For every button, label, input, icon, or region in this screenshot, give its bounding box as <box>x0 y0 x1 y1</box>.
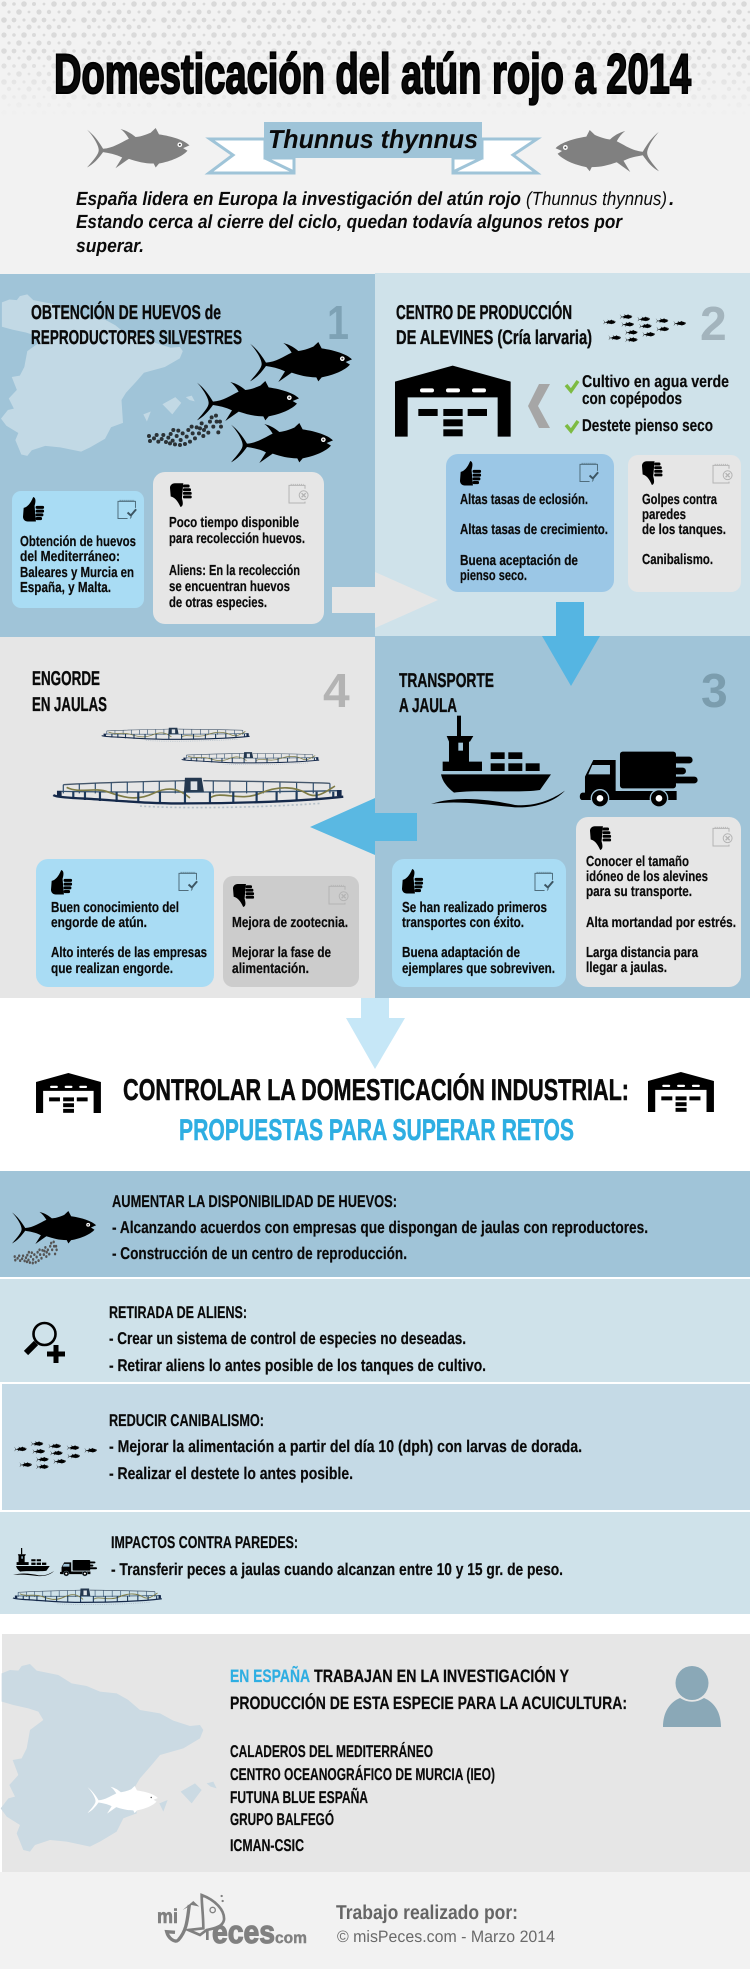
checklist <box>566 372 729 435</box>
icons: ship, truck, cage <box>13 1548 162 1605</box>
card: pros: Altas tasas de eclosión. <box>460 492 588 508</box>
text: - Construcción de un centro de reproducción. <box>112 1244 407 1263</box>
card: pros: pienso seco. <box>460 568 527 584</box>
heading: DE ALEVINES (Cría larvaria) <box>396 327 592 349</box>
card: cons: llegar a jaulas. <box>586 960 667 976</box>
icon: warehouse right <box>648 1072 714 1112</box>
credit: Trabajo realizado por: <box>336 1902 518 1924</box>
card: cons: de los tanques. <box>642 522 726 538</box>
card: cons: Mejorar la fase de <box>232 945 331 961</box>
icon: grey tuna right <box>556 130 659 172</box>
text: - Realizar el destete lo antes posible. <box>109 1464 353 1483</box>
checklist: Destete pienso seco <box>582 416 713 435</box>
card: cons: Golpes contra <box>642 492 718 508</box>
card: pros <box>36 859 214 987</box>
card: pros <box>12 491 144 608</box>
list of organisations: CENTRO OCEANOGRÁFICO DE MURCIA (IEO) <box>230 1764 495 1784</box>
card: cons: Canibalismo. <box>642 552 713 568</box>
heading <box>230 1665 627 1713</box>
heading: EN JAULAS <box>32 694 107 716</box>
list of organisations: CALADEROS DEL MEDITERRÁNEO <box>230 1741 433 1761</box>
section heading <box>123 1073 629 1147</box>
card: pros: del Mediterráneo: <box>20 549 120 565</box>
card: pros: Buena aceptación de <box>460 553 578 569</box>
list of organisations: ICMAN-CSIC <box>230 1836 304 1855</box>
footer <box>0 1872 750 1969</box>
icon: magnifier <box>26 1323 65 1363</box>
card: cons: para su transporte. <box>586 884 692 900</box>
card: cons: de otras especies. <box>169 595 267 611</box>
text: - Retirar aliens lo antes posible de los tanques de cultivo. <box>109 1356 486 1375</box>
band: aumentar huevos <box>0 1171 750 1277</box>
eggs <box>147 414 223 447</box>
card: pros: Se han realizado primeros <box>402 900 547 916</box>
card: pros: que realizan engorde. <box>51 961 173 977</box>
species ribbon <box>209 122 537 173</box>
heading: TRANSPORTE <box>399 670 494 692</box>
card: cons: idóneo de los alevines <box>586 869 708 885</box>
card: pros: transportes con éxito. <box>402 915 524 931</box>
card: cons: se encuentran huevos <box>169 579 290 595</box>
icon: tuna and eggs <box>12 1211 96 1264</box>
text <box>109 1411 582 1483</box>
card: pros: Buena adaptación de <box>402 945 520 961</box>
logo misPeces: com <box>275 1930 307 1947</box>
number 1: 1 <box>327 297 349 350</box>
card: pros: Alto interés de las empresas <box>51 945 207 961</box>
icon: warehouse left <box>36 1073 101 1113</box>
list of organisations: FUTUNA BLUE ESPAÑA <box>230 1787 368 1807</box>
card: cons: Aliens: En la recolección <box>169 563 300 579</box>
card: cons <box>153 472 324 624</box>
icon: warehouse <box>395 366 511 437</box>
icon: small fish school <box>14 1441 97 1469</box>
intro paragraph: superar. <box>76 236 144 257</box>
icon: grey tuna left <box>87 128 190 168</box>
list of organisations <box>230 1741 495 1855</box>
credit: © misPeces.com - Marzo 2014 <box>337 1928 555 1946</box>
heading: PRODUCCIÓN DE ESTA ESPECIE PARA LA ACUICULTURA: <box>230 1693 627 1713</box>
text: - Transferir peces a jaulas cuando alcanzan entre 10 y 15 gr. de peso. <box>111 1560 563 1579</box>
icon: person <box>663 1666 721 1727</box>
heading: REPRODUCTORES SILVESTRES <box>31 327 242 349</box>
text <box>111 1533 563 1579</box>
text: REDUCIR CANIBALISMO: <box>109 1411 264 1430</box>
map of Spain <box>1 294 195 456</box>
band: retirada de aliens <box>0 1279 750 1382</box>
logo misPeces: mi <box>157 1906 178 1928</box>
heading: CENTRO DE PRODUCCIÓN <box>396 301 572 324</box>
icon: truck <box>580 752 698 807</box>
heading: A JAULA <box>399 695 457 717</box>
credit <box>336 1902 555 1946</box>
card: pros: engorde de atún. <box>51 915 147 931</box>
card: cons: Poco tiempo disponible <box>169 515 299 531</box>
heading: ENGORDE <box>32 668 100 690</box>
logo misPeces: eces <box>212 1914 275 1950</box>
text <box>112 1192 648 1263</box>
arrow: to proposals <box>346 998 405 1069</box>
cages <box>53 728 343 808</box>
icon: white tuna <box>88 1786 158 1814</box>
heading: TRABAJAN EN LA INVESTIGACIÓN Y <box>314 1666 569 1686</box>
section heading: PROPUESTAS PARA SUPERAR RETOS <box>179 1114 574 1147</box>
heading <box>31 301 242 349</box>
panel 4: engorde en jaulas <box>0 637 375 998</box>
text <box>109 1303 486 1375</box>
number 2: 2 <box>700 298 727 351</box>
panel 1: obtención de huevos <box>0 274 375 637</box>
card: cons <box>576 817 741 987</box>
heading: OBTENCIÓN DE HUEVOS de <box>31 301 221 324</box>
small fish school <box>603 314 686 342</box>
panel 3: transporte a jaula <box>375 636 750 998</box>
card: pros: Obtención de huevos <box>20 534 136 550</box>
logo misPeces <box>157 1895 307 1950</box>
card: pros: Altas tasas de crecimiento. <box>460 522 608 538</box>
checklist: con copépodos <box>582 389 682 408</box>
text: - Crear un sistema de control de especies no deseadas. <box>109 1329 466 1348</box>
card: pros: ejemplares que sobreviven. <box>402 961 555 977</box>
arrow: step 1 to 2 <box>332 572 438 628</box>
chevron <box>528 384 550 428</box>
tuna school <box>197 342 352 463</box>
card: cons: Conocer el tamaño <box>586 854 689 870</box>
intro paragraph <box>76 189 674 257</box>
arrow: step 2 to 3 <box>542 602 600 686</box>
text: IMPACTOS CONTRA PAREDES: <box>111 1533 298 1552</box>
card: pros <box>446 454 614 592</box>
text: AUMENTAR LA DISPONIBILIDAD DE HUEVOS: <box>112 1192 397 1211</box>
card: cons: Larga distancia para <box>586 945 699 961</box>
heading <box>32 668 107 716</box>
list of organisations: GRUPO BALFEGÓ <box>230 1809 334 1829</box>
card: pros <box>392 859 566 987</box>
card: cons: para recolección huevos. <box>169 531 305 547</box>
card: pros: España, y Malta. <box>20 580 111 596</box>
number 4: 4 <box>323 665 350 718</box>
map of Spain <box>1 1664 217 1852</box>
intro paragraph: España lidera en Europa la investigación del atún rojo <box>76 189 521 210</box>
panel: en España <box>1 1634 750 1872</box>
heading: EN ESPAÑA <box>230 1665 310 1686</box>
icon: ship <box>431 716 565 807</box>
card: cons: alimentación. <box>232 961 309 977</box>
card: cons: Mejora de zootecnia. <box>232 915 348 931</box>
card: cons <box>223 876 359 987</box>
card: pros: Baleares y Murcia en <box>20 565 134 581</box>
card: pros: Buen conocimiento del <box>51 900 179 916</box>
text: - Mejorar la alimentación a partir del día 10 (dph) con larvas de dorada. <box>109 1437 582 1456</box>
card: cons: paredes <box>642 507 686 523</box>
header background <box>0 0 750 274</box>
arrow: step 3 to 4 <box>310 798 417 855</box>
species ribbon: Thunnus thynnus <box>268 124 478 154</box>
intro paragraph: Estando cerca al cierre del ciclo, quedan todavía algunos retos por <box>76 212 623 233</box>
number 3: 3 <box>701 665 728 718</box>
card: cons <box>628 455 741 592</box>
heading <box>399 670 494 717</box>
band: reducir canibalismo <box>2 1384 750 1510</box>
heading <box>396 301 592 349</box>
text: RETIRADA DE ALIENS: <box>109 1303 247 1322</box>
panel 2: centro de producción <box>375 273 750 636</box>
intro paragraph: (Thunnus thynnus) <box>526 189 667 210</box>
band: impactos contra paredes <box>0 1512 750 1614</box>
intro paragraph: . <box>669 189 674 210</box>
